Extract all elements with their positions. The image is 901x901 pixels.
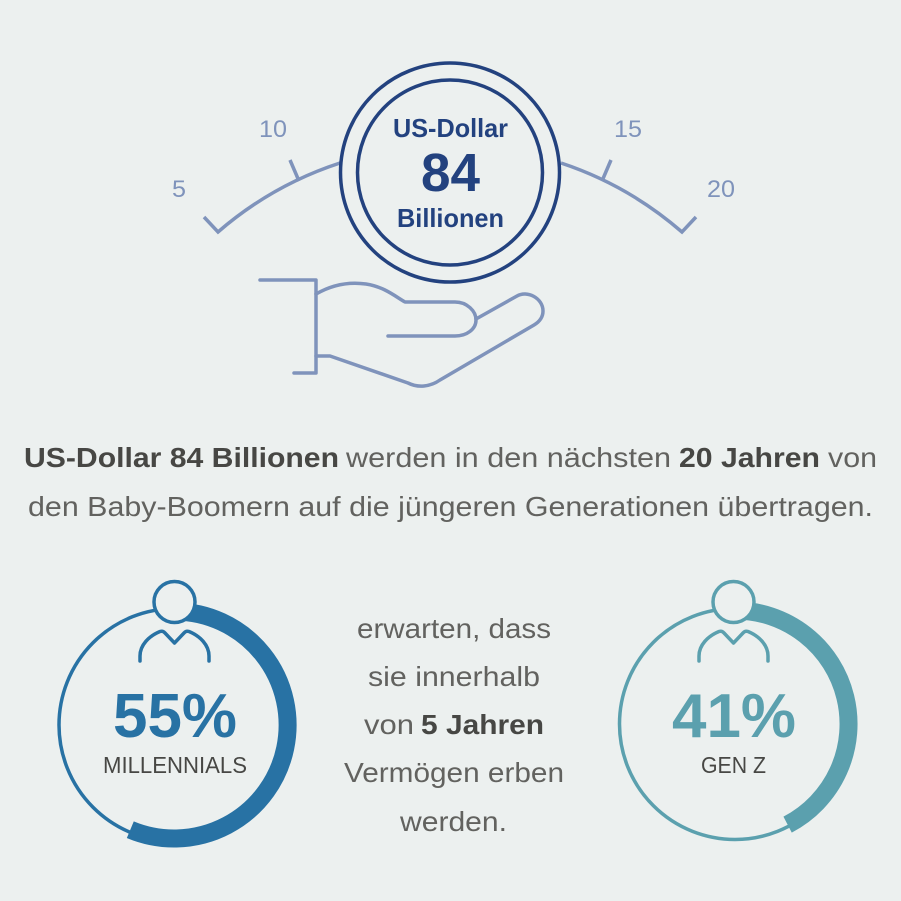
centre line 5: werden.	[399, 806, 507, 837]
gen z percentage: 41%	[672, 682, 796, 751]
gauge label 15: 15	[614, 116, 642, 143]
gauge: right tick	[602, 160, 611, 181]
statement: bold amount: US-Dollar 84 Billionen	[24, 442, 339, 473]
icon: person head	[154, 582, 195, 622]
statement: second line: den Baby-Boomern auf die jüngeren Generationen übertragen.	[28, 491, 873, 522]
statement: von: von	[828, 442, 877, 473]
coin text: US-Dollar: US-Dollar	[393, 113, 508, 143]
gauge label 20: 20	[707, 176, 735, 203]
centre line 4: Vermögen erben	[344, 757, 564, 788]
coin outer ring	[340, 63, 560, 282]
statement: bold duration: 20 Jahren	[679, 442, 820, 473]
gauge label 10: 10	[259, 116, 287, 143]
centre line 1: erwarten, dass	[357, 613, 551, 644]
millennials thin ring	[59, 608, 292, 842]
millennials label: MILLENNIALS	[103, 752, 247, 778]
icon: open hand	[260, 280, 543, 386]
gen z thick arc 41%	[735, 610, 849, 825]
gen z thin ring	[620, 608, 850, 840]
statement: middle words: werden in den nächsten	[345, 442, 671, 473]
icon: person shoulders	[140, 631, 209, 661]
panel: gen z donut	[620, 582, 850, 840]
text block: centre statement	[344, 613, 564, 837]
gauge: scale with ticks and labels	[172, 116, 735, 232]
centre line 3 bold: 5 Jahren	[421, 709, 544, 740]
millennials thick arc 55%	[130, 612, 288, 838]
coin inner ring	[358, 80, 542, 265]
gauge label 5: 5	[172, 176, 186, 203]
icon: person head	[713, 582, 754, 622]
centre line 3 regular: von	[364, 709, 414, 740]
coin text: 84: 84	[421, 143, 480, 203]
text block: main statement	[24, 442, 877, 522]
panel: millennials donut	[59, 582, 292, 842]
gen z label: GEN Z	[701, 752, 766, 778]
millennials percentage: 55%	[113, 682, 237, 751]
icon: person shoulders	[699, 631, 768, 661]
gauge: left tick	[290, 160, 299, 181]
centre line 2: sie innerhalb	[368, 661, 540, 692]
coin text: Billionen: Billionen	[397, 203, 504, 233]
gauge: left arc	[204, 163, 340, 232]
coin: double ring with amount	[340, 63, 560, 282]
gauge: right arc	[561, 163, 696, 232]
